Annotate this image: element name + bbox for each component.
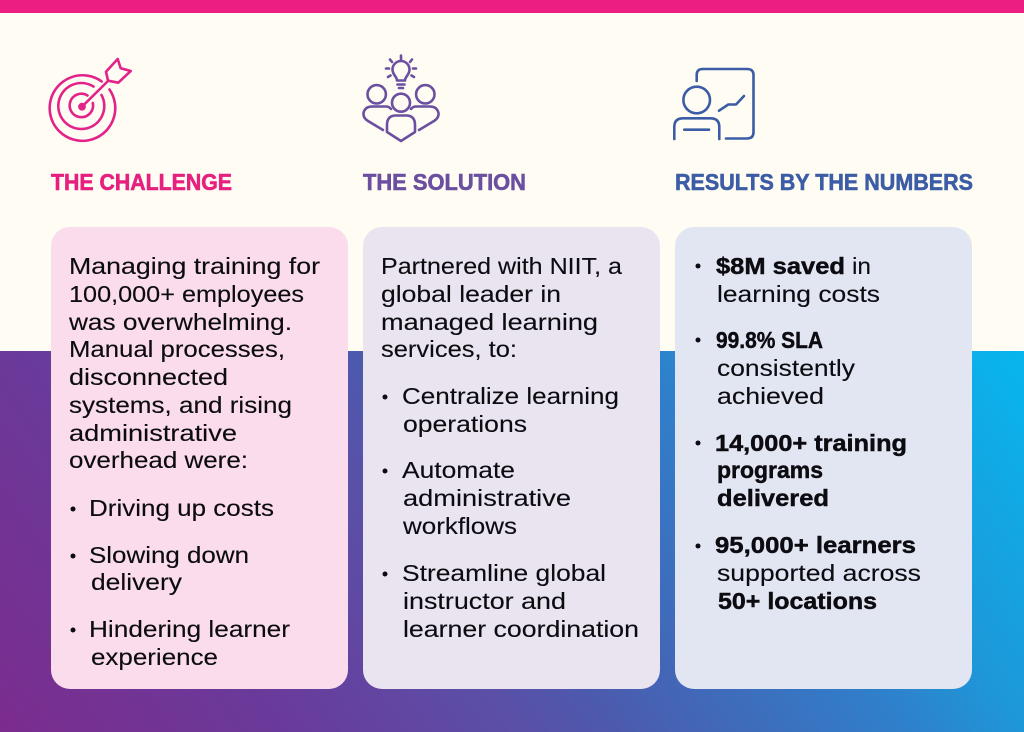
challenge text: was overwhelming. — [68, 309, 292, 335]
solution text: Centralize learning — [402, 383, 619, 409]
solution text: managed learning — [381, 309, 598, 335]
solution text — [381, 253, 639, 642]
results text: supported across — [717, 560, 921, 586]
results text: learning costs — [717, 281, 880, 307]
results text: 95,000+ learners — [715, 532, 916, 558]
results text: achieved — [717, 383, 824, 409]
challenge text: Driving up costs — [89, 495, 274, 521]
results text: delivered — [717, 485, 829, 511]
challenge text: disconnected — [69, 364, 228, 390]
challenge text: Hindering learner — [89, 616, 290, 642]
challenge text: Manual processes, — [69, 336, 285, 362]
icon: target with arrow — [50, 59, 131, 141]
solution text: operations — [403, 411, 527, 437]
challenge text: 100,000+ employees — [69, 281, 304, 307]
solution text: services, to: — [381, 336, 517, 362]
icon: team with lightbulb — [363, 56, 439, 141]
results text: 14,000+ training — [715, 430, 907, 456]
solution text: Automate — [402, 457, 515, 483]
solution text: workflows — [402, 513, 517, 539]
solution text: global leader in — [381, 281, 561, 307]
results text: $8M saved — [716, 253, 845, 279]
heading: results by the numbers: RESULTS BY THE NUMBERS — [675, 169, 973, 195]
results text: consistently — [717, 355, 855, 381]
solution text: instructor and — [403, 588, 566, 614]
panel: solution — [363, 227, 660, 689]
challenge text: overhead were: — [69, 447, 248, 473]
solution text: Streamline global — [402, 560, 606, 586]
challenge text: Slowing down — [89, 542, 249, 568]
solution text: administrative — [403, 485, 571, 511]
heading: the challenge: THE CHALLENGE — [51, 169, 232, 195]
top bar — [0, 0, 1024, 13]
heading: the solution: THE SOLUTION — [363, 169, 526, 195]
challenge text: administrative — [69, 420, 237, 446]
challenge text: experience — [91, 644, 218, 670]
panel: challenge — [51, 227, 348, 689]
icon: presenter with chart board — [674, 69, 754, 139]
results text: in — [852, 253, 871, 279]
panel: results — [675, 227, 972, 689]
challenge text — [68, 253, 320, 670]
challenge text: Managing training for — [69, 253, 320, 279]
solution text: Partnered with NIIT, a — [381, 253, 623, 279]
challenge text: systems, and rising — [69, 392, 292, 418]
results text — [696, 253, 921, 614]
results text: 50+ locations — [718, 588, 877, 614]
results text: 99.8% SLA — [716, 327, 823, 353]
challenge text: delivery — [91, 569, 182, 595]
solution text: learner coordination — [403, 616, 639, 642]
results text: programs — [717, 457, 823, 483]
